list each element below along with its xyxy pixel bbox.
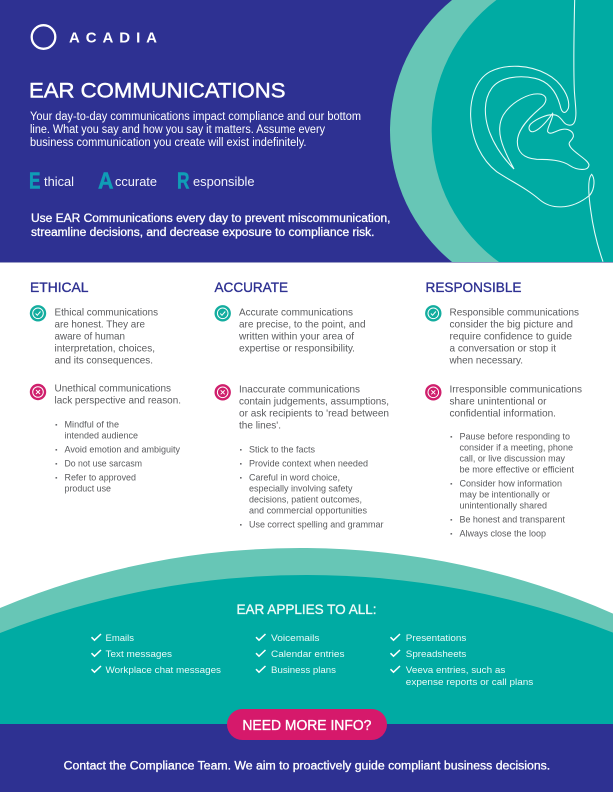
text block: use EAR: [31, 213, 390, 239]
list: responsible bullets: unintentionally shared: [460, 501, 547, 511]
list: ethical bullets: Do not use sarcasm: [64, 459, 142, 469]
icon: check: [214, 305, 231, 322]
EAR words: ccurate: [115, 174, 157, 189]
graphic: teal circles: [390, 0, 613, 262]
text: inaccurate: or ask recipients to 'read between: [239, 409, 389, 420]
list: ethical bullets: Mindful of the: [64, 420, 119, 430]
text: responsible definition: require confidence to guide: [450, 332, 572, 343]
EAR words: esponsible: [193, 174, 254, 189]
icon: check: [30, 305, 46, 322]
text: responsible definition: when necessary.: [449, 356, 523, 367]
panel: ethical: [30, 279, 181, 494]
text: accurate definition: Accurate communications: [239, 308, 353, 319]
text block: use EAR: streamline decisions, and decrease exposure to compliance risk.: [31, 227, 374, 239]
list: accurate bullets: decisions, patient outcomes,: [249, 495, 362, 505]
text: ethical definition: aware of human: [54, 332, 125, 343]
list: accurate bullets: Careful in word choice,: [249, 473, 340, 483]
text: accurate definition: [238, 308, 366, 355]
list: responsible bullets: consider if a meeting, phone: [460, 443, 573, 453]
list: column one: [92, 633, 221, 676]
list: column two: Business plans: [271, 665, 336, 676]
list: column one: Workplace chat messages: [106, 665, 221, 676]
list: accurate bullets: Use correct spelling and grammar: [249, 520, 384, 530]
list: ethical bullets: Avoid emotion and ambiguity: [64, 445, 180, 455]
EAR words: A: [98, 168, 114, 194]
icon: cross: [30, 384, 46, 400]
list: accurate bullets: [240, 445, 384, 530]
text: inaccurate: contain judgements, assumptions,: [239, 397, 389, 408]
text: responsible definition: Responsible communications: [450, 308, 579, 319]
graphic: teal arcs: [0, 548, 613, 724]
list: accurate bullets: and commercial opportunities: [249, 506, 367, 516]
list: ethical bullets: product use: [64, 484, 111, 494]
text: irresponsible: confidential information.: [450, 409, 556, 420]
text: responsible definition: consider the big picture and: [450, 320, 573, 331]
list: accurate bullets: especially involving safety: [249, 484, 353, 494]
list: ethical bullets: intended audience: [64, 431, 138, 441]
list: column three: Presentations: [406, 633, 467, 644]
button: need more info: NEED MORE INFO?: [242, 718, 371, 734]
text: ethical definition: Ethical communications: [54, 308, 158, 319]
text block: intro: [30, 111, 361, 149]
panel: header: [0, 0, 613, 263]
list: column two: Voicemails: [271, 633, 320, 644]
list: column one: Text messages: [106, 649, 172, 660]
EAR words: thical: [44, 174, 74, 189]
EAR words: E: [29, 168, 40, 194]
logo: Acadia: ACADIA: [69, 30, 157, 46]
text: responsible definition: a conversation or stop it: [450, 344, 556, 355]
panel: responsible: [425, 279, 582, 539]
panel: EAR applies to all: [0, 548, 613, 724]
list: responsible bullets: be more effective or efficient: [460, 465, 575, 475]
list: responsible bullets: call, or live discussion may: [460, 454, 565, 464]
text: accurate definition: are precise, to the point, and: [239, 320, 366, 331]
text: unethical: lack perspective and reason.: [54, 396, 181, 407]
text: irresponsible: Irresponsible communications: [450, 385, 582, 396]
list: accurate bullets: Provide context when needed: [249, 459, 368, 469]
text: contact: Contact the Compliance Team. We aim to proactively guide compliant business decisions.: [64, 760, 550, 772]
list: column three: Spreadsheets: [406, 649, 467, 660]
text: accurate definition: expertise or responsibility.: [239, 344, 355, 355]
panel: accurate: [214, 279, 389, 530]
text block: intro: business communication you create will exist indefinitely.: [30, 137, 306, 149]
text: accurate definition: written within your area of: [238, 332, 354, 343]
list: column one: Emails: [106, 633, 134, 644]
list: column two: [256, 633, 345, 676]
heading: applies: EAR APPLIES TO ALL:: [236, 601, 376, 617]
button: need more info: [227, 709, 387, 740]
list: responsible bullets: Consider how information: [460, 479, 562, 489]
list: responsible bullets: Be honest and transparent: [460, 515, 565, 525]
icon: ear line drawing: [471, 0, 603, 262]
EAR words: [29, 168, 254, 194]
EAR words: R: [177, 168, 190, 194]
list: accurate bullets: Stick to the facts: [249, 445, 315, 455]
list: column three: Veeva entries, such as: [406, 665, 506, 676]
list: column three: expense reports or call plans: [406, 677, 534, 688]
text: responsible definition: [449, 308, 579, 367]
list: column three: [390, 633, 534, 688]
text: inaccurate: Inaccurate communications: [239, 385, 360, 396]
text: ethical definition: [54, 308, 158, 367]
heading: accurate: ACCURATE: [214, 279, 288, 295]
text: inaccurate: [239, 385, 389, 432]
text: irresponsible: share unintentional or: [450, 397, 547, 408]
title: EAR COMMUNICATIONS: [29, 80, 286, 102]
text: unethical: [54, 384, 181, 407]
text: inaccurate: the lines'.: [239, 421, 281, 432]
text block: intro: Your day-to-day communications impact compliance and our bottom: [30, 111, 361, 123]
text: ethical definition: are honest. They are: [54, 320, 145, 331]
list: responsible bullets: Pause before responding to: [460, 432, 570, 442]
logo: Acadia: [32, 25, 157, 49]
list: ethical bullets: Refer to approved: [64, 473, 136, 483]
list: responsible bullets: Always close the loop: [460, 529, 546, 539]
panel: contact footer: [0, 709, 613, 792]
text: unethical: Unethical communications: [54, 384, 171, 395]
icon: check: [425, 305, 442, 322]
text: ethical definition: interpretation, choices,: [54, 344, 155, 355]
text: ethical definition: and its consequences.: [54, 356, 153, 367]
text block: use EAR: Use EAR Communications every day to prevent miscommunication,: [31, 213, 390, 225]
text: irresponsible: [450, 385, 582, 420]
text block: intro: line. What you say and how you say it matters. Assume every: [30, 124, 325, 136]
list: responsible bullets: may be intentionally or: [460, 490, 550, 500]
list: responsible bullets: [450, 432, 575, 539]
list: ethical bullets: [56, 420, 180, 494]
list: column two: Calendar entries: [271, 649, 345, 660]
heading: ethical: ETHICAL: [30, 279, 89, 295]
icon: cross: [425, 384, 442, 400]
icon: cross: [214, 384, 231, 400]
heading: responsible: RESPONSIBLE: [426, 279, 522, 295]
